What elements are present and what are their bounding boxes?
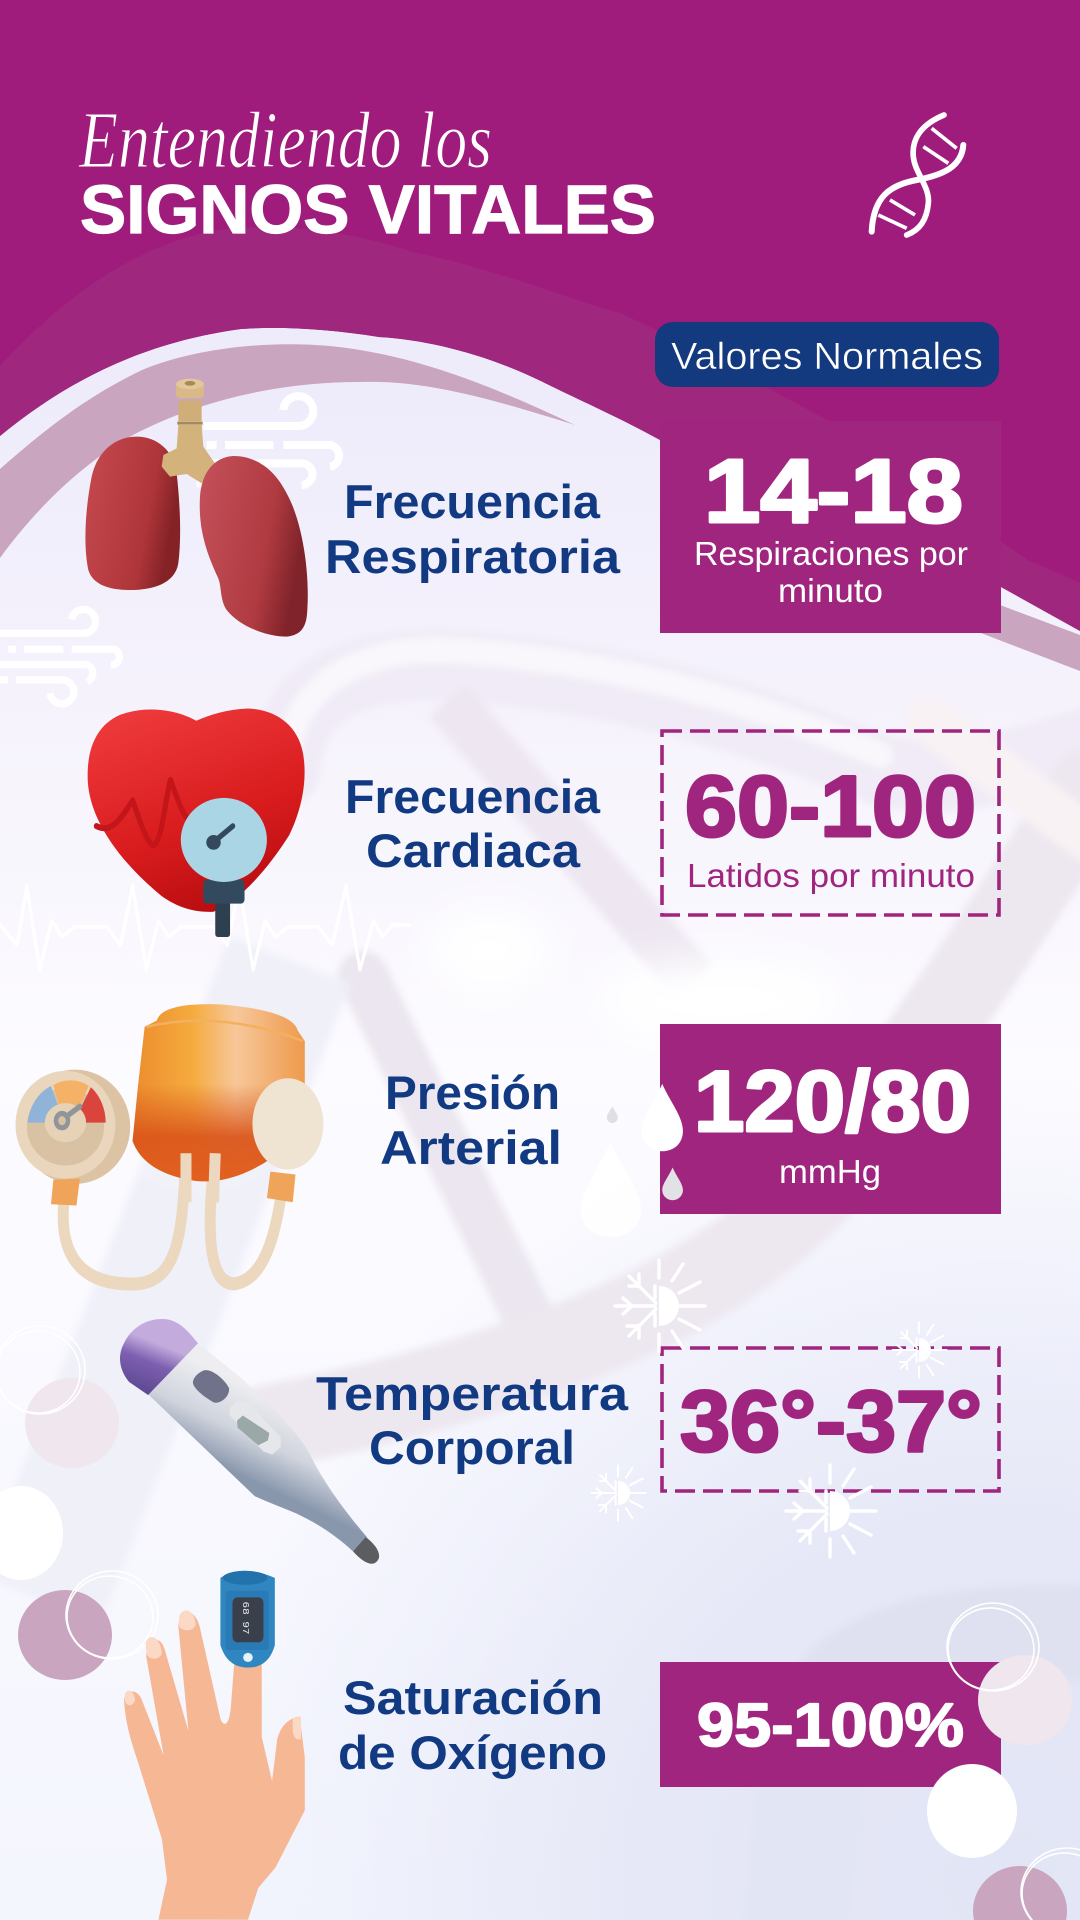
icon: lungs xyxy=(85,379,308,637)
background bottom right tint xyxy=(0,1000,1080,1920)
rose wave band right xyxy=(960,590,1080,671)
gauge xyxy=(20,1070,130,1184)
label: Presion Arterial: Presión xyxy=(385,1066,560,1119)
icon: sun snow large upper xyxy=(615,1260,705,1352)
rose wave band left xyxy=(0,344,575,558)
oximeter display xyxy=(232,1597,263,1642)
tip xyxy=(353,1537,379,1564)
value box: cardiac xyxy=(662,731,999,915)
bulb xyxy=(252,1078,323,1170)
label: Frecuencia Respiratoria: Frecuencia xyxy=(344,475,601,528)
icon: water drops xyxy=(581,1084,683,1237)
label: Presion Arterial: Arterial xyxy=(380,1121,562,1174)
value 14-18: 14-18 xyxy=(704,442,963,542)
title bold line: SIGNOS VITALES xyxy=(80,171,656,248)
display frame xyxy=(229,1401,281,1455)
trachea xyxy=(162,379,215,483)
icon: blood pressure cuff xyxy=(15,1004,323,1284)
pill: Valores Normales xyxy=(655,322,999,387)
label: Saturacion de Oxigeno xyxy=(338,1671,607,1779)
label: Temperatura Corporal: Temperatura xyxy=(316,1367,629,1420)
label: Presion Arterial xyxy=(380,1066,562,1174)
icon: heart with gauge xyxy=(88,709,305,937)
gauge neck xyxy=(215,900,230,937)
value box: temperature xyxy=(662,1348,999,1491)
pulse on heart xyxy=(96,780,188,845)
label: Frecuencia Cardiaca xyxy=(345,770,601,877)
hand xyxy=(124,1612,305,1920)
ghost DNA photo background xyxy=(40,650,1080,1920)
button xyxy=(193,1370,229,1403)
icon: hand with pulse oximeter xyxy=(124,1571,305,1920)
title script line: Entendiendo los xyxy=(78,97,492,185)
icon: sun snow small left xyxy=(592,1465,646,1521)
right lung xyxy=(200,456,308,637)
value 60-100: 60-100 xyxy=(685,759,976,855)
fingernails xyxy=(125,1610,301,1740)
gauge needle xyxy=(214,826,233,842)
body xyxy=(148,1343,367,1551)
icon: thermometer xyxy=(120,1319,379,1564)
heart xyxy=(88,709,305,912)
icon: wind lower xyxy=(0,609,119,704)
tubes xyxy=(63,1153,281,1284)
value box: respiratory: minuto xyxy=(778,572,883,609)
cap xyxy=(120,1319,198,1395)
value box: oxygen xyxy=(660,1662,1001,1787)
gauge dial xyxy=(181,798,267,882)
oximeter readout: 68 97 xyxy=(239,1602,250,1635)
label: Saturacion de Oxigeno: de Oxígeno xyxy=(338,1726,607,1779)
unit text: Latidos por minuto xyxy=(687,857,975,894)
oximeter body xyxy=(220,1571,275,1668)
value 120/80: 120/80 xyxy=(694,1054,971,1150)
icon: ECG line xyxy=(0,886,410,970)
icon: wind upper xyxy=(197,396,339,485)
cuff body xyxy=(133,1004,305,1181)
pill: Valores Normales: Valores Normales xyxy=(671,336,983,378)
decorative blobs right xyxy=(927,1602,1080,1920)
unit text: mmHg xyxy=(779,1153,881,1190)
label: Frecuencia Respiratoria: Respiratoria xyxy=(325,530,621,583)
unit text: Respiraciones por xyxy=(694,535,968,572)
icon: sun snow small right xyxy=(893,1322,947,1378)
label: Frecuencia Respiratoria xyxy=(325,475,621,583)
label: Saturacion de Oxigeno: Saturación xyxy=(343,1671,603,1724)
icon: DNA helix xyxy=(872,115,963,235)
header lighter wave xyxy=(0,227,1080,660)
title xyxy=(78,97,656,248)
label: Temperatura Corporal xyxy=(316,1367,629,1474)
label: Frecuencia Cardiaca: Cardiaca xyxy=(366,824,581,877)
label: Temperatura Corporal: Corporal xyxy=(369,1421,575,1474)
icon: sun snow large lower xyxy=(786,1465,876,1557)
display xyxy=(237,1415,269,1445)
value 95-100%: 95-100% xyxy=(697,1691,964,1759)
left lung xyxy=(85,437,180,590)
value box: pressure xyxy=(660,1024,1001,1214)
decorative blobs left xyxy=(0,1326,158,1680)
cuff rim xyxy=(146,1021,303,1041)
value 36-37: 36°-37° xyxy=(680,1374,982,1470)
connectors xyxy=(51,1179,80,1206)
soft glows xyxy=(140,910,840,1160)
header purple wave xyxy=(0,0,1080,631)
label: Frecuencia Cardiaca: Frecuencia xyxy=(345,770,601,823)
value box: respiratory xyxy=(660,421,1001,633)
